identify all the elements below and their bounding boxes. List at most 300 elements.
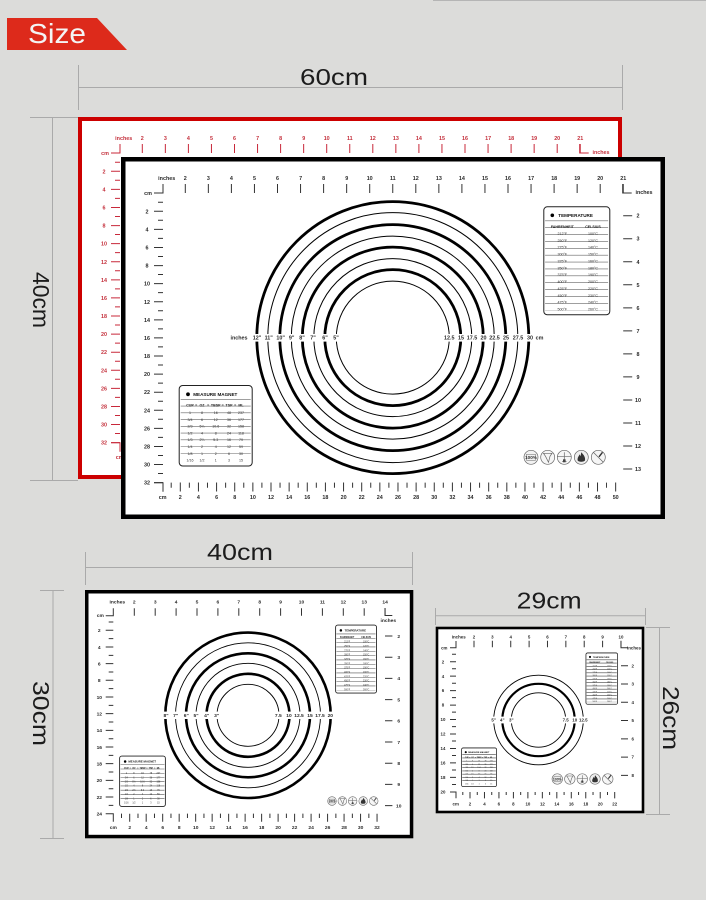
bottom cm ruler	[453, 794, 618, 807]
circle labels: 17.5	[315, 713, 325, 719]
red rulers: 30	[101, 423, 107, 429]
table: measure magnet: 48	[227, 411, 231, 415]
table: measure magnet: 4	[142, 794, 144, 796]
bottom cm ruler: 20	[598, 802, 603, 807]
circle labels: 5"	[333, 336, 339, 342]
top inch ruler: 12	[413, 176, 419, 182]
red rulers: inches	[115, 136, 132, 142]
table: temperature: 400°F	[557, 280, 568, 284]
table: measure magnet: 10.6	[477, 767, 481, 769]
circle labels: 5"	[491, 718, 496, 723]
table: measure magnet: 2	[215, 452, 217, 456]
table: measure magnet: 6	[228, 452, 230, 456]
table: measure magnet: 118	[157, 786, 161, 788]
red rulers: 14	[101, 278, 107, 284]
circle labels: 8"	[299, 336, 305, 342]
circle labels: 20	[480, 336, 486, 342]
bottom cm ruler: 26	[395, 495, 401, 501]
circle labels: 5"	[193, 713, 199, 719]
table: temperature: 350°F	[557, 266, 568, 270]
bottom cm ruler: 4	[483, 802, 486, 807]
bottom cm ruler: 24	[308, 825, 314, 831]
circle labels: 15	[307, 713, 313, 719]
table: temperature: 120°C	[363, 646, 370, 648]
left cm ruler	[97, 614, 113, 822]
circle labels: 12.5	[294, 713, 304, 719]
icons: care symbols	[328, 797, 378, 805]
table: measure magnet: TBSP	[139, 768, 146, 770]
table: measure magnet: 2⅔	[471, 774, 474, 776]
right inch ruler: 7	[631, 755, 634, 760]
table: measure magnet: 1/2	[132, 803, 136, 805]
table: measure magnet: 1/2	[466, 770, 468, 772]
table: temperature: 260°C	[588, 308, 598, 312]
table: measure magnet: 15	[239, 458, 243, 462]
table: temperature: CELSIUS	[361, 637, 371, 639]
top inch ruler: 16	[505, 176, 511, 182]
right inch ruler: 12	[635, 444, 641, 450]
red rulers: 26	[101, 386, 107, 392]
bottom cm ruler: 24	[377, 495, 383, 501]
table: measure magnet: 1/4	[187, 445, 192, 449]
bottom cm ruler: 14	[554, 802, 560, 807]
table: temperature: CELSIUS	[585, 225, 601, 229]
top inch ruler: 14	[459, 176, 465, 182]
table: temperature: 190°C	[607, 685, 613, 687]
table: measure magnet: 16	[214, 411, 218, 415]
table: measure magnet: 16	[478, 761, 480, 763]
top inch ruler: 13	[361, 600, 367, 606]
table: temperature: 140°C	[607, 672, 613, 674]
red rulers: 3	[164, 136, 167, 142]
bottom cm ruler: 32	[449, 495, 455, 501]
table: measure magnet: 237	[490, 761, 493, 763]
table: measure magnet: 2/3	[125, 781, 129, 783]
left cm ruler: 14	[97, 728, 102, 734]
table: temperature: 120°C	[607, 669, 613, 671]
table: measure magnet: 24	[484, 770, 486, 772]
red rulers: inches	[592, 150, 610, 156]
table: measure magnet: 177	[156, 777, 161, 779]
table: measure magnet: 6	[472, 764, 473, 766]
table: measure magnet: 30	[239, 452, 243, 456]
table: measure magnet: =	[469, 757, 470, 759]
bottom cm ruler: 40	[522, 495, 528, 501]
table: measure magnet: ML	[157, 768, 161, 770]
table: measure magnet: 16	[227, 438, 231, 442]
table: measure magnet: =	[146, 768, 148, 770]
table: measure magnet: 2	[479, 780, 480, 782]
table: measure magnet: 8	[215, 432, 217, 436]
top inch ruler: 18	[551, 176, 557, 182]
top inch ruler: 9	[279, 600, 282, 606]
top inch ruler	[450, 634, 642, 651]
table: temperature: 350°F	[344, 663, 351, 665]
right inch ruler: 4	[631, 700, 634, 705]
table: measure magnet: 4	[215, 445, 217, 449]
table: temperature: 180°C	[607, 682, 613, 684]
table: temperature	[544, 207, 610, 315]
right inch ruler	[624, 663, 634, 778]
right inch ruler: 5	[631, 718, 634, 723]
table: temperature: 220°C	[363, 676, 370, 678]
red rulers: 24	[101, 368, 107, 374]
left cm ruler: 14	[441, 746, 446, 751]
left cm ruler: cm	[97, 614, 104, 619]
table: measure magnet: 12	[478, 764, 480, 766]
right inch ruler: 2	[636, 214, 640, 220]
top inch ruler: 6	[276, 176, 279, 182]
bottom cm ruler: 42	[540, 495, 546, 501]
table: measure magnet: 2/3	[187, 425, 192, 429]
top inch ruler: 4	[230, 176, 233, 182]
table: temperature: FAHRENHEIT	[589, 661, 601, 664]
right inch ruler: 3	[631, 682, 634, 687]
table: temperature: 230°C	[588, 294, 598, 298]
red rulers: 2	[141, 136, 144, 142]
table: temperature: 400°F	[593, 688, 597, 690]
table: measure magnet: 1	[133, 798, 135, 800]
table: measure magnet: =	[482, 757, 483, 759]
left cm ruler: 12	[441, 732, 446, 737]
table: measure magnet: TSP	[149, 768, 154, 770]
bottom cm ruler: 28	[341, 825, 347, 831]
table: temperature: 300°F	[593, 675, 597, 677]
table: measure magnet: 36	[484, 764, 486, 766]
table: measure magnet: 1/3	[125, 790, 129, 792]
circle labels: 12"	[253, 336, 262, 342]
table: measure magnet: =	[154, 768, 156, 770]
dimension: 40cm height: 40cm	[28, 272, 54, 328]
table: measure magnet: 1	[189, 411, 191, 415]
table: measure magnet: 1/8	[466, 780, 468, 782]
red rulers: 19	[531, 136, 537, 142]
bottom cm ruler: 4	[145, 825, 148, 831]
table: measure magnet: MEASURE MAGNET	[128, 760, 156, 764]
red rulers: 6	[102, 206, 106, 212]
circle labels: 4"	[500, 718, 505, 723]
bottom cm ruler: 14	[286, 495, 292, 501]
table: measure magnet: 1/8	[187, 452, 192, 456]
table: measure magnet: ML	[490, 757, 492, 759]
top inch ruler: inches	[452, 634, 466, 639]
red rulers: 13	[393, 136, 399, 142]
bottom cm ruler: cm	[159, 495, 167, 501]
table: temperature: TEMPERATURE	[593, 656, 610, 659]
icons: care symbols: 100%	[328, 799, 336, 803]
top inch ruler: 2	[473, 634, 476, 639]
red rulers: cm	[116, 455, 124, 461]
red rulers: 9	[302, 136, 305, 142]
bottom cm ruler: 10	[525, 802, 531, 807]
top inch ruler: 3	[207, 176, 210, 182]
table: temperature: 212°F	[557, 232, 568, 236]
red rulers: 8	[279, 136, 282, 142]
tag: Size heading	[7, 18, 127, 50]
circle labels: 15	[458, 336, 464, 342]
left cm ruler	[441, 645, 456, 798]
top inch ruler: 7	[299, 176, 302, 182]
left cm ruler	[144, 191, 163, 492]
table: measure magnet: 1/3	[466, 774, 468, 776]
circle labels: 6"	[184, 713, 189, 719]
table: measure magnet: 8	[479, 770, 480, 772]
top inch ruler: 4	[175, 600, 178, 606]
table: temperature: 375°F	[593, 685, 597, 687]
left cm ruler: 32	[144, 481, 150, 487]
circle labels: 10"	[276, 336, 285, 342]
bottom cm ruler: 6	[215, 495, 218, 501]
tag: Size heading: Size	[28, 18, 86, 49]
table: measure magnet	[179, 386, 252, 466]
mat: 29x26	[437, 628, 643, 812]
circle labels: 11"	[265, 336, 273, 342]
top inch ruler: 2	[184, 176, 187, 182]
top inch ruler: 2	[133, 600, 136, 606]
table: measure magnet: 5⅓	[199, 425, 204, 429]
bottom cm ruler: 22	[359, 495, 365, 501]
left cm ruler: 8	[146, 264, 148, 270]
top inch ruler: inches	[158, 176, 175, 182]
bottom cm ruler: 18	[322, 495, 328, 501]
circle labels: 12.5	[579, 718, 588, 723]
table: measure magnet: 24	[150, 786, 153, 788]
right inch ruler: 2	[631, 663, 634, 668]
table: temperature: 375°F	[344, 668, 351, 670]
red rulers: 16	[101, 296, 107, 302]
left cm ruler: 22	[144, 390, 150, 396]
top inch ruler: 8	[258, 600, 261, 606]
table: measure magnet: 2	[201, 445, 203, 449]
circle labels	[162, 712, 335, 719]
top inch ruler: 5	[196, 600, 199, 606]
table: temperature: 450°F	[593, 695, 597, 697]
table: measure magnet: 2⅔	[199, 438, 204, 442]
table: temperature: 100°C	[588, 232, 598, 236]
right inch ruler: 7	[636, 329, 640, 335]
icons: care symbols	[524, 450, 605, 464]
table: temperature: FAHRENHEIT	[551, 225, 575, 229]
circle labels: 10	[286, 713, 292, 719]
table: temperature: 100°C	[363, 642, 370, 644]
right inch ruler: 8	[397, 761, 400, 767]
table: measure magnet: 32	[227, 425, 231, 429]
table: measure magnet: 1/3	[187, 438, 192, 442]
left cm ruler: 16	[441, 761, 446, 766]
table: measure magnet: OZ	[132, 768, 136, 770]
table: measure magnet: 1/2	[125, 786, 129, 788]
red rulers	[101, 136, 610, 461]
table: measure magnet: 59	[239, 445, 243, 449]
red rulers: 10	[101, 242, 107, 248]
right inch ruler	[628, 214, 641, 473]
table: temperature: 450°F	[557, 294, 568, 298]
left cm ruler: 24	[144, 408, 150, 414]
table: temperature: TEMPERATURE	[345, 628, 366, 632]
red rulers: 22	[101, 350, 107, 356]
top inch ruler: 11	[320, 600, 325, 606]
table: measure magnet: 79	[239, 438, 243, 442]
circle labels: 17.5	[467, 336, 477, 342]
table: temperature: 160°C	[363, 659, 370, 661]
top inch ruler: 7	[565, 634, 568, 639]
bottom cm ruler: 4	[197, 495, 200, 501]
table: measure magnet: 5.3	[478, 774, 480, 776]
top inch ruler	[154, 176, 653, 196]
table: measure magnet: 16	[484, 774, 486, 776]
red rulers: cm	[101, 151, 109, 157]
table: measure magnet	[462, 748, 497, 787]
right inch ruler	[389, 634, 402, 809]
right inch ruler: 4	[636, 260, 640, 266]
table: temperature: 425°F	[593, 691, 597, 693]
left cm ruler: cm	[144, 191, 152, 197]
red rulers: 2	[102, 169, 106, 175]
table: temperature: 325°F	[344, 659, 351, 661]
table: measure magnet: 1	[466, 761, 467, 763]
bottom cm ruler: 34	[468, 495, 474, 501]
red rulers: 11	[347, 136, 353, 142]
left cm ruler: 12	[144, 300, 150, 306]
bottom cm ruler: 2	[128, 825, 131, 831]
red rulers: 7	[256, 136, 259, 142]
table: measure magnet: 3	[228, 458, 230, 462]
table: measure magnet: 5⅓	[471, 767, 474, 769]
red rulers: 18	[508, 136, 514, 142]
left cm ruler: 20	[441, 790, 446, 795]
table: measure magnet: 8	[472, 761, 473, 763]
red rulers: 17	[485, 136, 491, 142]
bottom cm ruler: 8	[233, 495, 236, 501]
top inch ruler: 15	[482, 176, 488, 182]
table: temperature: 260°C	[363, 689, 370, 691]
table: measure magnet: 8	[142, 786, 144, 788]
table: temperature: 230°C	[607, 695, 613, 697]
table: measure magnet: 6	[201, 418, 203, 422]
red rulers: 21	[577, 136, 583, 142]
table: temperature: 325°F	[593, 678, 597, 680]
circle labels: 3"	[509, 718, 514, 723]
circle labels: 7"	[310, 336, 316, 342]
icons: care symbols: 100%	[553, 777, 562, 781]
red rulers: 32	[101, 441, 107, 447]
right inch ruler: 6	[636, 306, 640, 312]
table: measure magnet: 3/4	[125, 777, 129, 779]
top inch ruler: 11	[390, 176, 396, 182]
table: temperature: 500°F	[344, 689, 351, 691]
top inch ruler: 13	[436, 176, 442, 182]
table: temperature	[336, 625, 377, 693]
table: temperature: 160°C	[607, 678, 613, 680]
icons: care symbols	[552, 774, 613, 784]
top inch ruler: 14	[382, 600, 388, 606]
bottom cm ruler: 6	[161, 825, 164, 831]
table: measure magnet: 10.6	[140, 781, 145, 783]
table: measure magnet: TSP	[484, 757, 488, 759]
circle labels: 20	[328, 713, 333, 719]
bottom cm ruler: 32	[374, 825, 380, 831]
circle labels: inches	[230, 336, 248, 342]
circle labels: cm	[536, 336, 544, 342]
table: measure magnet: MEASURE MAGNET	[193, 392, 238, 397]
table: measure magnet: 2/3	[466, 767, 468, 769]
table: measure magnet: 59	[157, 794, 160, 796]
table: measure magnet: 10.6	[212, 425, 219, 429]
table: temperature: 160°C	[588, 259, 598, 263]
top inch ruler: 7	[237, 600, 240, 606]
table: temperature: TEMPERATURE	[558, 213, 593, 218]
top inch ruler: 3	[491, 634, 494, 639]
top inch ruler: 10	[299, 600, 304, 606]
concentric circles	[494, 675, 583, 765]
table: measure magnet: 4	[133, 786, 135, 788]
table: measure magnet: 1/4	[466, 777, 468, 779]
table: measure magnet: 6	[150, 798, 152, 800]
red rulers: 18	[101, 314, 107, 320]
table: temperature: 425°F	[557, 287, 568, 291]
table: measure magnet: 177	[238, 418, 244, 422]
table: measure magnet: 4	[479, 777, 480, 779]
table: measure magnet: 158	[156, 781, 161, 783]
left cm ruler: 10	[144, 282, 150, 288]
circle labels: 7.5	[275, 713, 282, 719]
right inch ruler: 13	[635, 467, 641, 473]
top inch ruler: 6	[217, 600, 220, 606]
top inch ruler: inches	[627, 646, 642, 651]
table: temperature: 350°F	[593, 682, 597, 684]
table: measure magnet: 36	[150, 777, 153, 779]
left cm ruler: 20	[97, 778, 102, 784]
table: measure magnet: CUP	[124, 768, 129, 770]
left cm ruler: 10	[441, 717, 446, 722]
left cm ruler: 16	[97, 745, 102, 751]
table: measure magnet: 5.3	[213, 438, 218, 442]
left cm ruler: 18	[97, 761, 102, 767]
table: measure magnet: 16	[150, 790, 153, 792]
top inch ruler: 10	[367, 176, 373, 182]
right inch ruler: 3	[636, 237, 640, 243]
left cm ruler: 2	[442, 659, 445, 664]
red rulers: 5	[210, 136, 213, 142]
table: temperature: 140°C	[588, 246, 598, 250]
table: temperature: 300°F	[557, 253, 568, 257]
table: measure magnet: 4	[201, 432, 203, 436]
bottom cm ruler: 22	[292, 825, 298, 831]
table: measure magnet: 177	[490, 764, 493, 766]
table: measure magnet: 1/8	[125, 798, 129, 800]
right inch ruler: 6	[631, 736, 634, 741]
top inch ruler: 10	[619, 634, 624, 639]
left cm ruler: 2	[146, 209, 148, 215]
top inch ruler: 12	[341, 600, 346, 606]
left cm ruler: 28	[144, 444, 150, 450]
red rulers: 20	[554, 136, 560, 142]
table: measure magnet: =	[234, 404, 236, 408]
table: measure magnet: 12	[484, 777, 486, 779]
bottom cm ruler: cm	[453, 802, 459, 807]
table: measure magnet: 1/2	[471, 783, 474, 785]
top inch ruler: inches	[635, 190, 653, 196]
table: measure magnet: 79	[490, 774, 492, 776]
right inch ruler: 10	[635, 398, 641, 404]
bottom cm ruler: cm	[110, 826, 117, 831]
bottom cm ruler: 44	[558, 495, 564, 501]
bottom cm ruler: 8	[512, 802, 515, 807]
table: temperature: 425°F	[344, 676, 351, 678]
right inch ruler: 8	[631, 773, 634, 778]
table: measure magnet: 12	[141, 777, 144, 779]
bottom cm ruler: 20	[341, 495, 347, 501]
